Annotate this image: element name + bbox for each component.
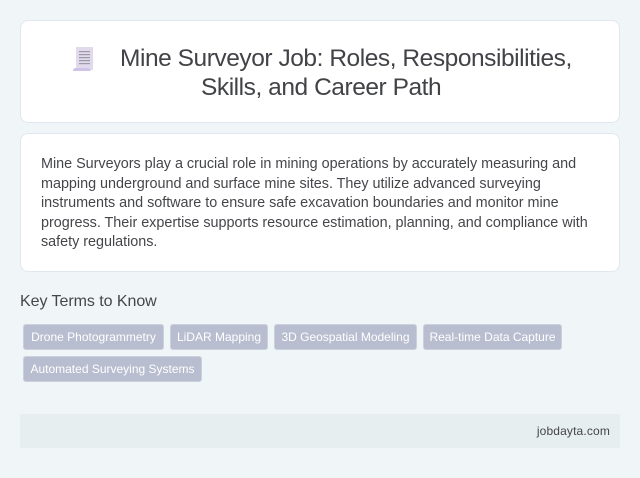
tag: 3d geospatial modeling: 3D Geospatial Modeling bbox=[281, 330, 410, 344]
tag: automated surveying systems bbox=[23, 356, 202, 382]
description card bbox=[20, 133, 620, 272]
tag: lidar mapping bbox=[170, 324, 268, 350]
icon: document scroll bbox=[73, 47, 93, 71]
footer bar bbox=[20, 414, 620, 448]
tag: drone photogrammetry: Drone Photogrammetry bbox=[31, 330, 156, 344]
footer text: jobdayta.com bbox=[537, 424, 610, 438]
title: Skills, and Career Path bbox=[201, 74, 441, 101]
key term tags bbox=[23, 324, 562, 382]
header card bbox=[20, 20, 620, 123]
description text: instruments and software to ensure safe excavation boundaries and monitor mine bbox=[41, 195, 559, 211]
tag: lidar mapping: LiDAR Mapping bbox=[177, 330, 261, 344]
tag: real-time data capture bbox=[423, 324, 562, 350]
description text: progress. Their expertise supports resource estimation, planning, and compliance with bbox=[41, 215, 588, 231]
tag: drone photogrammetry bbox=[23, 324, 164, 350]
description text: safety regulations. bbox=[41, 234, 157, 250]
description text: mapping underground and surface mine sites. They utilize advanced surveying bbox=[41, 176, 541, 192]
tag: 3d geospatial modeling bbox=[274, 324, 417, 350]
tag: real-time data capture: Real-time Data Capture bbox=[429, 330, 556, 344]
title: Mine Surveyor Job: Roles, Responsibilities, bbox=[120, 45, 572, 72]
description text: Mine Surveyors play a crucial role in mining operations by accurately measuring and bbox=[41, 156, 576, 172]
description text bbox=[41, 156, 588, 250]
tag: automated surveying systems: Automated Surveying Systems bbox=[30, 362, 195, 376]
title bbox=[120, 45, 572, 101]
heading: key terms: Key Terms to Know bbox=[20, 293, 157, 310]
